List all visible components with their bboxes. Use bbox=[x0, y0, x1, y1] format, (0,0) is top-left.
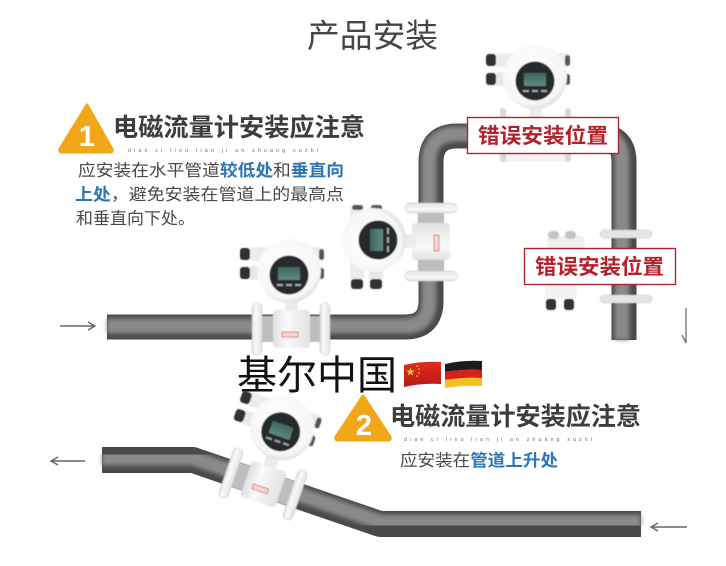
label: wrong install position upper: 错误安装位置 bbox=[478, 124, 608, 148]
pinyin 1: dian ci liou lian ji an zhuang xuzhi bbox=[128, 148, 318, 154]
heading 2: 电磁流量计安装应注意 bbox=[390, 402, 641, 431]
label: wrong install position lower bbox=[524, 248, 676, 284]
heading 1: 电磁流量计安装应注意 bbox=[113, 113, 365, 142]
instruction text 1: 应安装在水平管道 较低处和垂直向 bbox=[78, 160, 344, 180]
label: wrong install position upper bbox=[468, 118, 618, 154]
arrow: flow in, upper left bbox=[60, 322, 95, 330]
warning badge 2 bbox=[336, 396, 390, 442]
meter: wrong position on descending pipe bbox=[545, 230, 652, 310]
flag: Germany bbox=[445, 361, 482, 388]
pipe: upper system with bends bbox=[107, 134, 624, 340]
flag: China: ★ bbox=[406, 367, 415, 377]
arrow: flow down, right bbox=[682, 308, 686, 343]
pinyin 2: dian ci liou lian ji an zhuang xuzhi bbox=[404, 437, 592, 443]
warning badge 1: 1 bbox=[79, 121, 95, 153]
instruction text 1: 和垂直向下处。 bbox=[76, 209, 195, 228]
arrow: flow in, lower right bbox=[651, 523, 687, 531]
meter: correct vertical upward section bbox=[342, 203, 457, 289]
meter: wrong position at top of pipe bbox=[486, 45, 571, 162]
pipe: lower rising section bbox=[102, 458, 641, 524]
brand text: 基尔中国 bbox=[237, 354, 397, 398]
instruction text 1: 上处，避免安装在管道上的最高点 bbox=[75, 185, 344, 204]
flag: China bbox=[404, 362, 441, 387]
label: wrong install position lower: 错误安装位置 bbox=[535, 255, 664, 279]
instruction text 1 bbox=[75, 160, 344, 228]
arrow: flow out, lower left bbox=[51, 457, 85, 465]
title: 产品安装 bbox=[307, 18, 438, 54]
warning badge 1 bbox=[60, 105, 112, 153]
instruction text 2: 应安装在 管道上升处 bbox=[400, 450, 559, 470]
meter: correct horizontal low point bbox=[240, 239, 330, 355]
warning badge 2: 2 bbox=[356, 410, 372, 442]
meter: correct rising pipe bbox=[218, 382, 326, 521]
